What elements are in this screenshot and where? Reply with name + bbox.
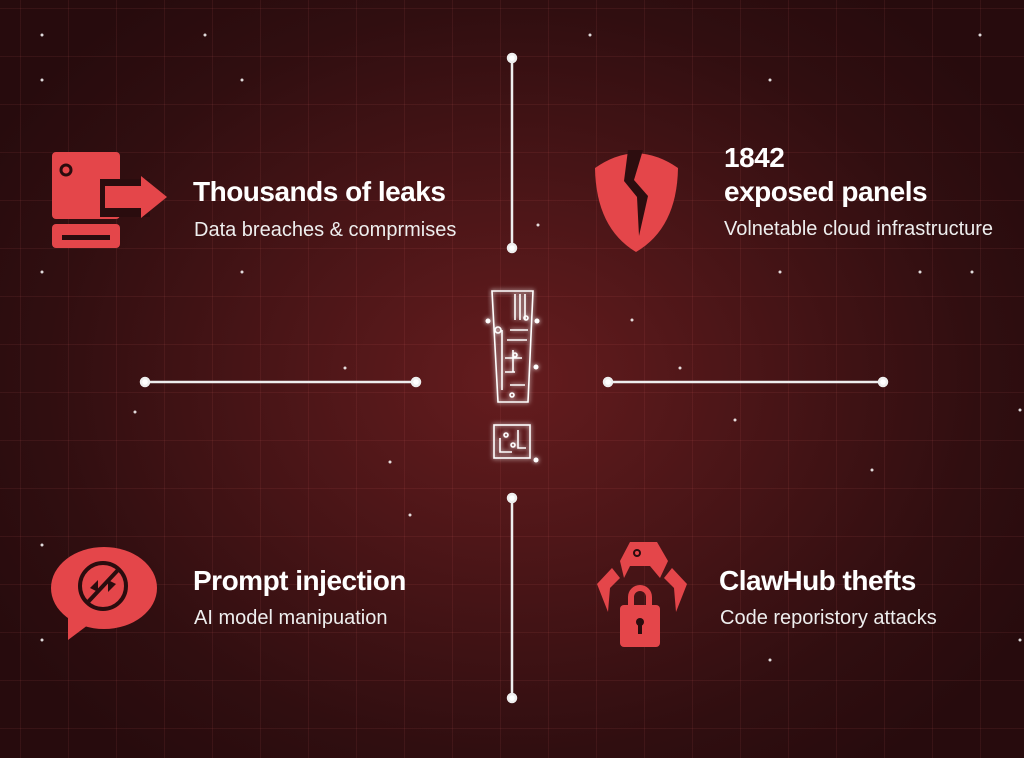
icon: claw lock — [597, 542, 687, 647]
text: prompt: Prompt injection — [193, 565, 406, 596]
icon: exclamation circuit — [492, 291, 533, 458]
text: Volnetable cloud infrastructure — [724, 218, 993, 240]
icon: data leak — [52, 152, 167, 248]
text: panels: 1842 — [724, 142, 784, 173]
icon: broken shield — [595, 150, 678, 252]
text: panels: exposed panels — [724, 176, 927, 207]
text: Data breaches & comprmises — [194, 219, 456, 241]
icon: chat no — [51, 547, 157, 640]
connector lines — [141, 54, 887, 702]
text: leaks: Thousands of leaks — [193, 176, 445, 207]
text: panels — [724, 142, 927, 207]
text: AI model manipuation — [194, 607, 387, 629]
text: clawhub: ClawHub thefts — [719, 565, 916, 596]
text: Code reporistory attacks — [720, 607, 937, 629]
